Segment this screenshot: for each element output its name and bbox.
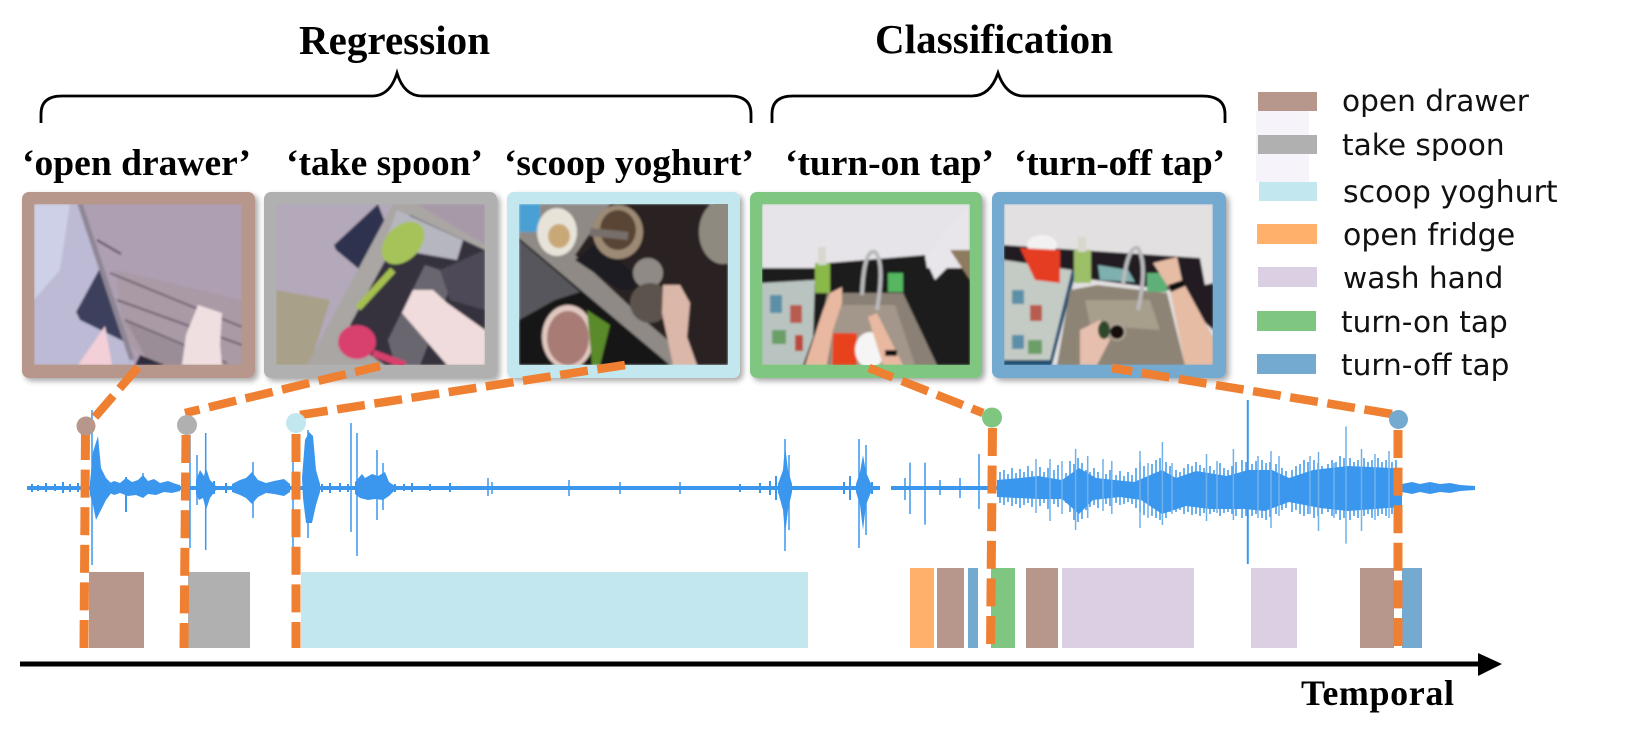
legend item: turn-off tap [1257, 348, 1509, 382]
panel: scoop yoghurt frame [507, 192, 747, 378]
orange dashed connector: open drawer [95, 366, 139, 417]
panel: turn-off tap frame [992, 192, 1226, 378]
legend item: wash hand: wash hand [1343, 261, 1503, 295]
legend item: turn-on tap: turn-on tap [1341, 305, 1508, 339]
vertical dashed line: take spoon [184, 435, 186, 648]
legend item: take spoon: take spoon [1342, 128, 1505, 162]
label: take spoon: ‘take spoon’ [286, 143, 483, 184]
segment timeline bars [89, 568, 1422, 648]
marker dot: turn-off tap [1389, 410, 1408, 429]
heading: Regression: Regression [299, 17, 490, 63]
vertical dashed line: turn-off tap [1394, 430, 1402, 652]
legend item: open drawer [1258, 84, 1530, 118]
orange dashed connector: turn-on tap [869, 368, 983, 413]
legend item: open drawer: open drawer [1342, 84, 1530, 118]
brace: classification [772, 73, 1225, 123]
panel: turn-on tap frame [750, 192, 982, 378]
label: open drawer: ‘open drawer’ [22, 143, 251, 184]
audio waveform [27, 400, 1475, 565]
legend item: turn-on tap [1257, 305, 1508, 339]
orange dashed connector: scoop yoghurt [300, 365, 625, 415]
legend item: take spoon [1258, 128, 1505, 162]
panel: open drawer frame [22, 192, 255, 378]
marker dot: take spoon [177, 415, 197, 435]
vertical dashed line: scoop yoghurt [292, 434, 300, 648]
panel: take spoon frame [264, 192, 497, 378]
heading: Classification: Classification [875, 16, 1113, 62]
orange dashed connector: take spoon [185, 366, 380, 413]
label: turn-on tap: ‘turn-on tap’ [785, 143, 994, 184]
label: scoop yoghurt: ‘scoop yoghurt’ [504, 143, 754, 184]
vertical dashed line: open drawer [84, 432, 86, 648]
marker dot: open drawer [76, 416, 96, 436]
legend item: open fridge [1257, 218, 1515, 253]
orange dashed connector: turn-off tap [1112, 368, 1392, 414]
label: turn-off tap: ‘turn-off tap’ [1014, 143, 1225, 184]
legend item: wash hand [1258, 261, 1503, 295]
vertical dashed line: turn-on tap [990, 428, 992, 650]
brace: regression [41, 73, 751, 123]
legend item: open fridge: open fridge [1343, 218, 1515, 253]
legend item: turn-off tap: turn-off tap [1341, 348, 1509, 382]
axis label: Temporal: Temporal [1301, 673, 1454, 713]
legend [1256, 84, 1558, 382]
temporal axis arrow [20, 653, 1502, 676]
legend item: scoop yoghurt: scoop yoghurt [1343, 175, 1558, 210]
marker dot: turn-on tap [982, 408, 1002, 428]
marker dot: scoop yoghurt [286, 413, 306, 433]
